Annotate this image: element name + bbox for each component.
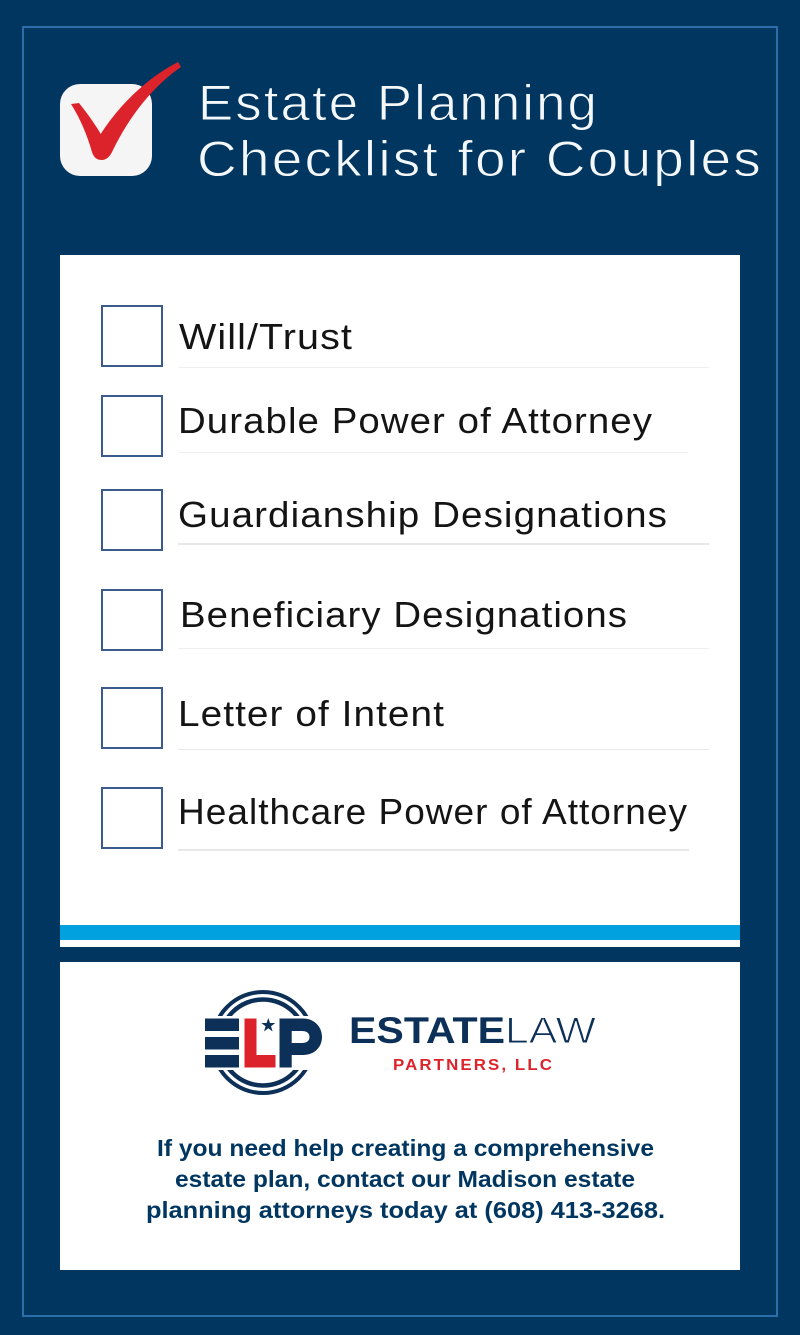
checklist item: Will/Trust [102, 306, 709, 368]
title: Estate Planning [198, 75, 599, 131]
call to action text: estate plan, contact our Madison estate [175, 1166, 635, 1192]
divider band: blue and navy stripes [60, 925, 740, 962]
panel: footer [60, 962, 740, 1270]
checklist item: Healthcare Power of Attorney [102, 788, 689, 851]
checklist item: Durable Power of Attorney [102, 396, 688, 456]
call to action text: planning attorneys today at (608) 413-3268. [146, 1197, 665, 1223]
logo: Estate Law Partners [205, 992, 596, 1093]
call to action text: If you need help creating a comprehensive [157, 1135, 654, 1161]
title: Checklist for Couples [197, 131, 763, 187]
checklist item: Will/Trust: Will/Trust [179, 316, 353, 357]
logo wordmark: ESTATE [349, 1010, 505, 1051]
icon: red check in rounded box [60, 62, 181, 176]
checklist item: Beneficiary Designations: Beneficiary Designations [180, 594, 628, 635]
logo wordmark [349, 1010, 596, 1074]
call to action text [146, 1135, 665, 1223]
checklist item: Guardianship Designations [102, 490, 709, 550]
checklist item: Letter of Intent: Letter of Intent [178, 693, 445, 734]
checklist item: Healthcare Power of Attorney: Healthcare Power of Attorney [178, 791, 688, 832]
title [197, 75, 763, 187]
logo wordmark: PARTNERS, LLC [393, 1057, 554, 1074]
checklist item: Durable Power of Attorney: Durable Power of Attorney [178, 400, 653, 441]
checklist item: Letter of Intent [102, 688, 709, 750]
checklist item: Guardianship Designations: Guardianship Designations [178, 494, 668, 535]
checklist item: Beneficiary Designations [102, 590, 709, 650]
panel: checklist [60, 255, 740, 925]
logo emblem [205, 992, 322, 1093]
logo wordmark: LAW [505, 1010, 596, 1051]
header [60, 62, 763, 187]
